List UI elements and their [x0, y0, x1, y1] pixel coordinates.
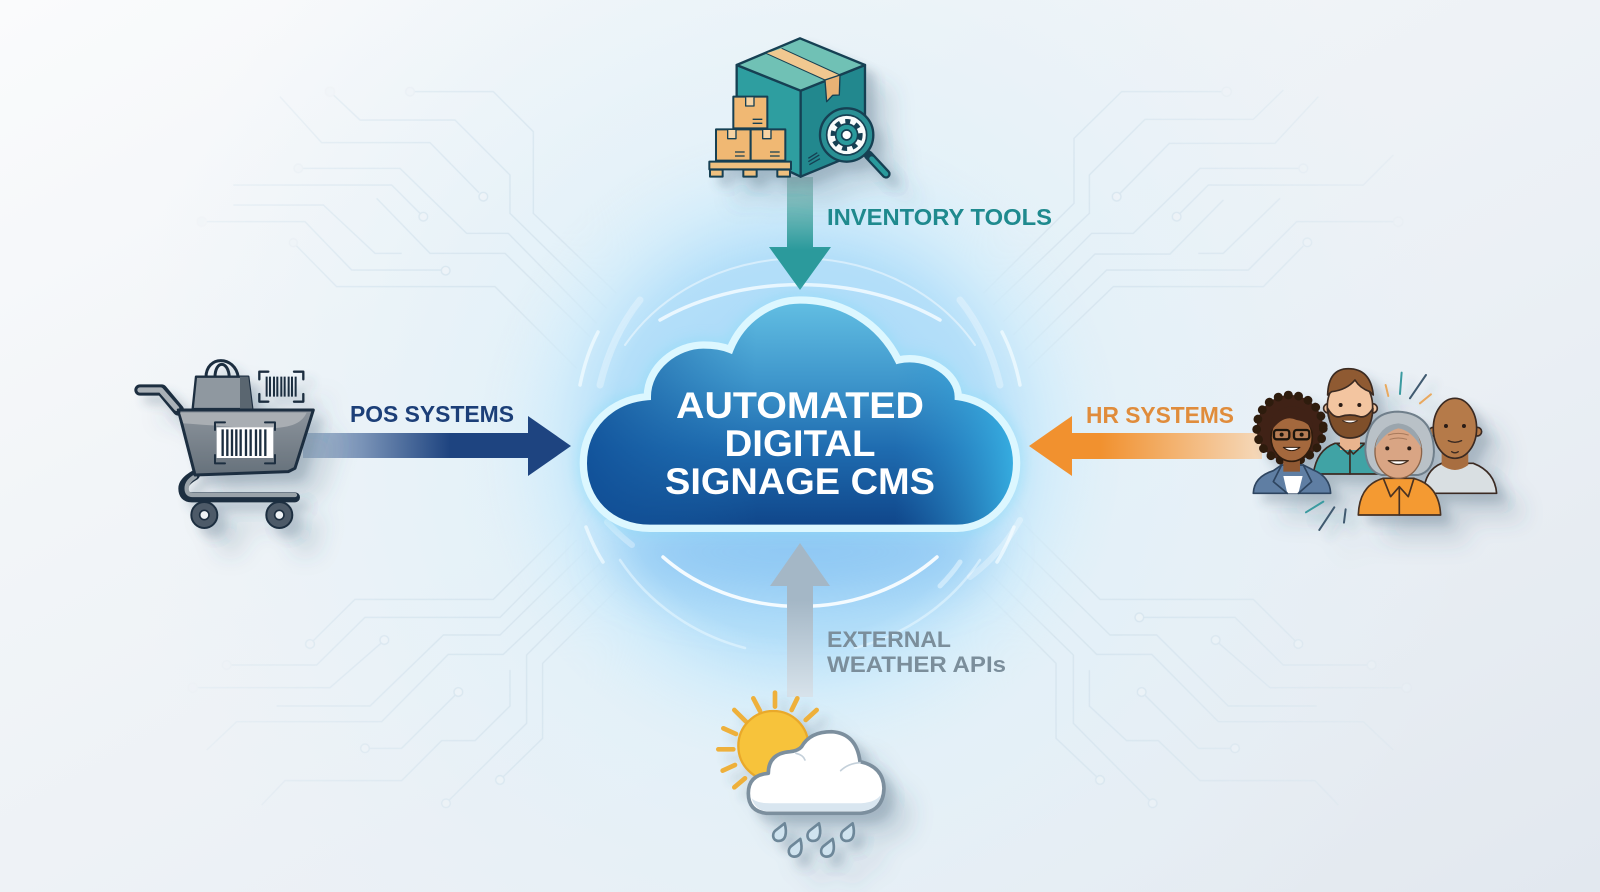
central halo glow	[480, 126, 1120, 766]
rain cloud	[748, 732, 884, 813]
shopping bag	[193, 361, 252, 409]
bearded man	[1313, 369, 1385, 474]
label: inventory tools: INVENTORY TOOLS	[827, 204, 1052, 230]
central cloud	[583, 300, 1017, 528]
cloud title	[665, 385, 935, 502]
arrow: POS systems	[303, 416, 571, 476]
icon: shopping cart	[140, 361, 313, 528]
label: HR systems: HR SYSTEMS	[1086, 402, 1234, 428]
sun rays	[718, 693, 817, 787]
label: external weather APIs: EXTERNAL	[827, 627, 951, 652]
icon: sun and rain cloud	[718, 693, 884, 857]
cloud title: DIGITAL	[724, 423, 876, 464]
icon: inventory box	[709, 38, 886, 177]
woman with glasses	[1253, 395, 1331, 493]
cloud title: SIGNAGE CMS	[665, 461, 935, 502]
arrow: HR systems	[1029, 416, 1262, 476]
circuit traces background	[188, 87, 1411, 808]
glowing rings around cloud	[580, 258, 1020, 648]
arrow: inventory tools	[769, 177, 831, 290]
small barcode	[259, 372, 303, 402]
label: external weather APIs: WEATHER APIs	[827, 652, 1006, 677]
rain drops	[773, 823, 854, 857]
label: external weather APIs	[827, 627, 1006, 677]
label: POS systems: POS SYSTEMS	[350, 401, 514, 427]
spark lines	[1306, 373, 1431, 530]
sun	[738, 711, 808, 781]
cloud title: AUTOMATED	[676, 385, 924, 426]
icon: HR people group	[1253, 369, 1497, 530]
bald man	[1423, 398, 1497, 493]
arrow: weather APIs	[770, 543, 830, 697]
older woman	[1358, 412, 1441, 515]
large barcode	[217, 427, 273, 458]
